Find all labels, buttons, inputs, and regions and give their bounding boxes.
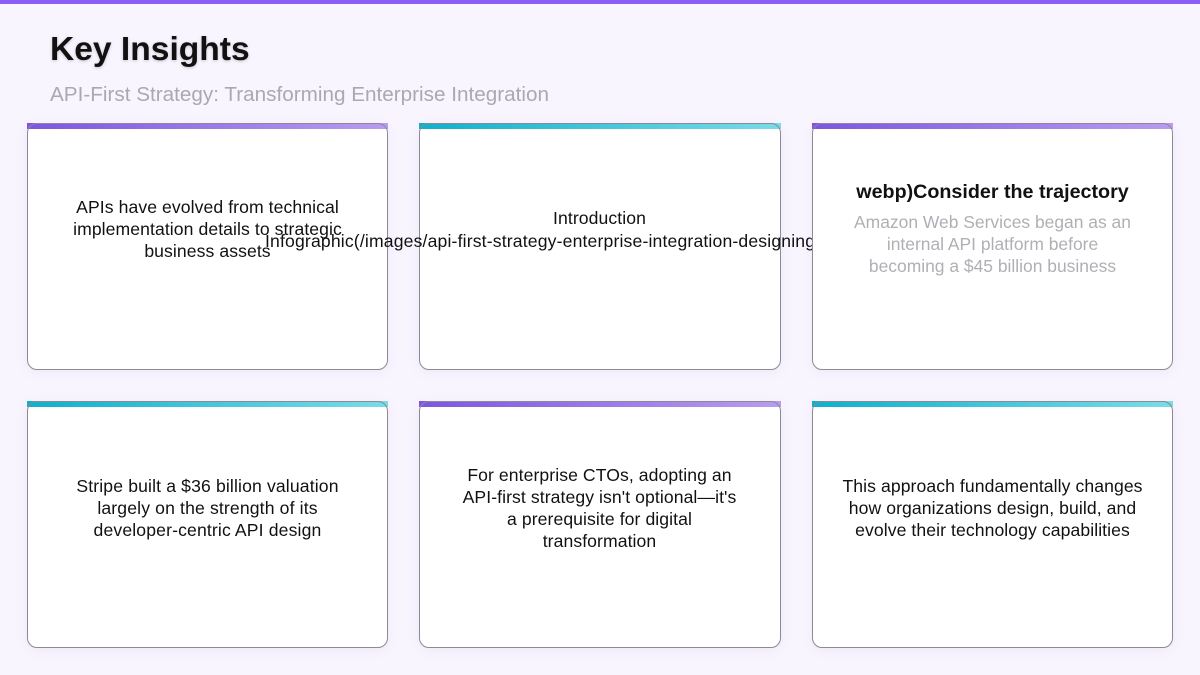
subtitle: API-First Strategy: Transforming Enterprise Integration (50, 83, 549, 106)
panel: card 3 trajectory (812, 123, 1173, 370)
title: Key Insights (50, 31, 250, 68)
card 3 heading: webp)Consider the trajectory (856, 181, 1129, 203)
card 1 text (73, 197, 342, 261)
card 3 description: internal API platform before (887, 234, 1098, 254)
card 5 text: a prerequisite for digital (507, 509, 692, 529)
card 1 text: APIs have evolved from technical (76, 197, 339, 217)
card 2 heading text: Introduction (553, 208, 646, 228)
card 5 accent bar (419, 401, 781, 407)
card 4 text (76, 476, 339, 540)
panel: card 4 Stripe (27, 401, 388, 648)
card 4 text: developer-centric API design (94, 520, 321, 540)
card 1 accent bar (27, 123, 388, 129)
card 2 accent bar (419, 123, 781, 129)
card 5 text (462, 465, 736, 551)
card 5 text: For enterprise CTOs, adopting an (467, 465, 732, 485)
card 5 text: API-first strategy isn't optional—it's (463, 487, 736, 507)
card 6 text (842, 476, 1143, 540)
panel: card 6 approach (812, 401, 1173, 648)
card 2 overflowing text: Infographic(/images/api-first-strategy-enterprise-integration-designing (265, 231, 815, 251)
card 1 text: business assets (144, 241, 271, 261)
card 5 text: transformation (543, 531, 656, 551)
card 6 text: evolve their technology capabilities (855, 520, 1130, 540)
panel: card 1 APIs evolved (27, 123, 388, 370)
panel: card 2 introduction (419, 123, 781, 370)
card 4 text: Stripe built a $36 billion valuation (76, 476, 339, 496)
card 6 text: This approach fundamentally changes (842, 476, 1143, 496)
panel: card 5 enterprise CTOs (419, 401, 781, 648)
top accent bar (0, 0, 1200, 4)
card 3 accent bar (812, 123, 1173, 129)
card 3 description: becoming a $45 billion business (869, 256, 1116, 276)
card 3 description (854, 212, 1131, 276)
card 6 text: how organizations design, build, and (849, 498, 1136, 518)
card 1 text: implementation details to strategic (73, 219, 342, 239)
card 3 description: Amazon Web Services began as an (854, 212, 1131, 232)
card 4 accent bar (27, 401, 388, 407)
card 6 accent bar (812, 401, 1173, 407)
card 4 text: largely on the strength of its (97, 498, 318, 518)
